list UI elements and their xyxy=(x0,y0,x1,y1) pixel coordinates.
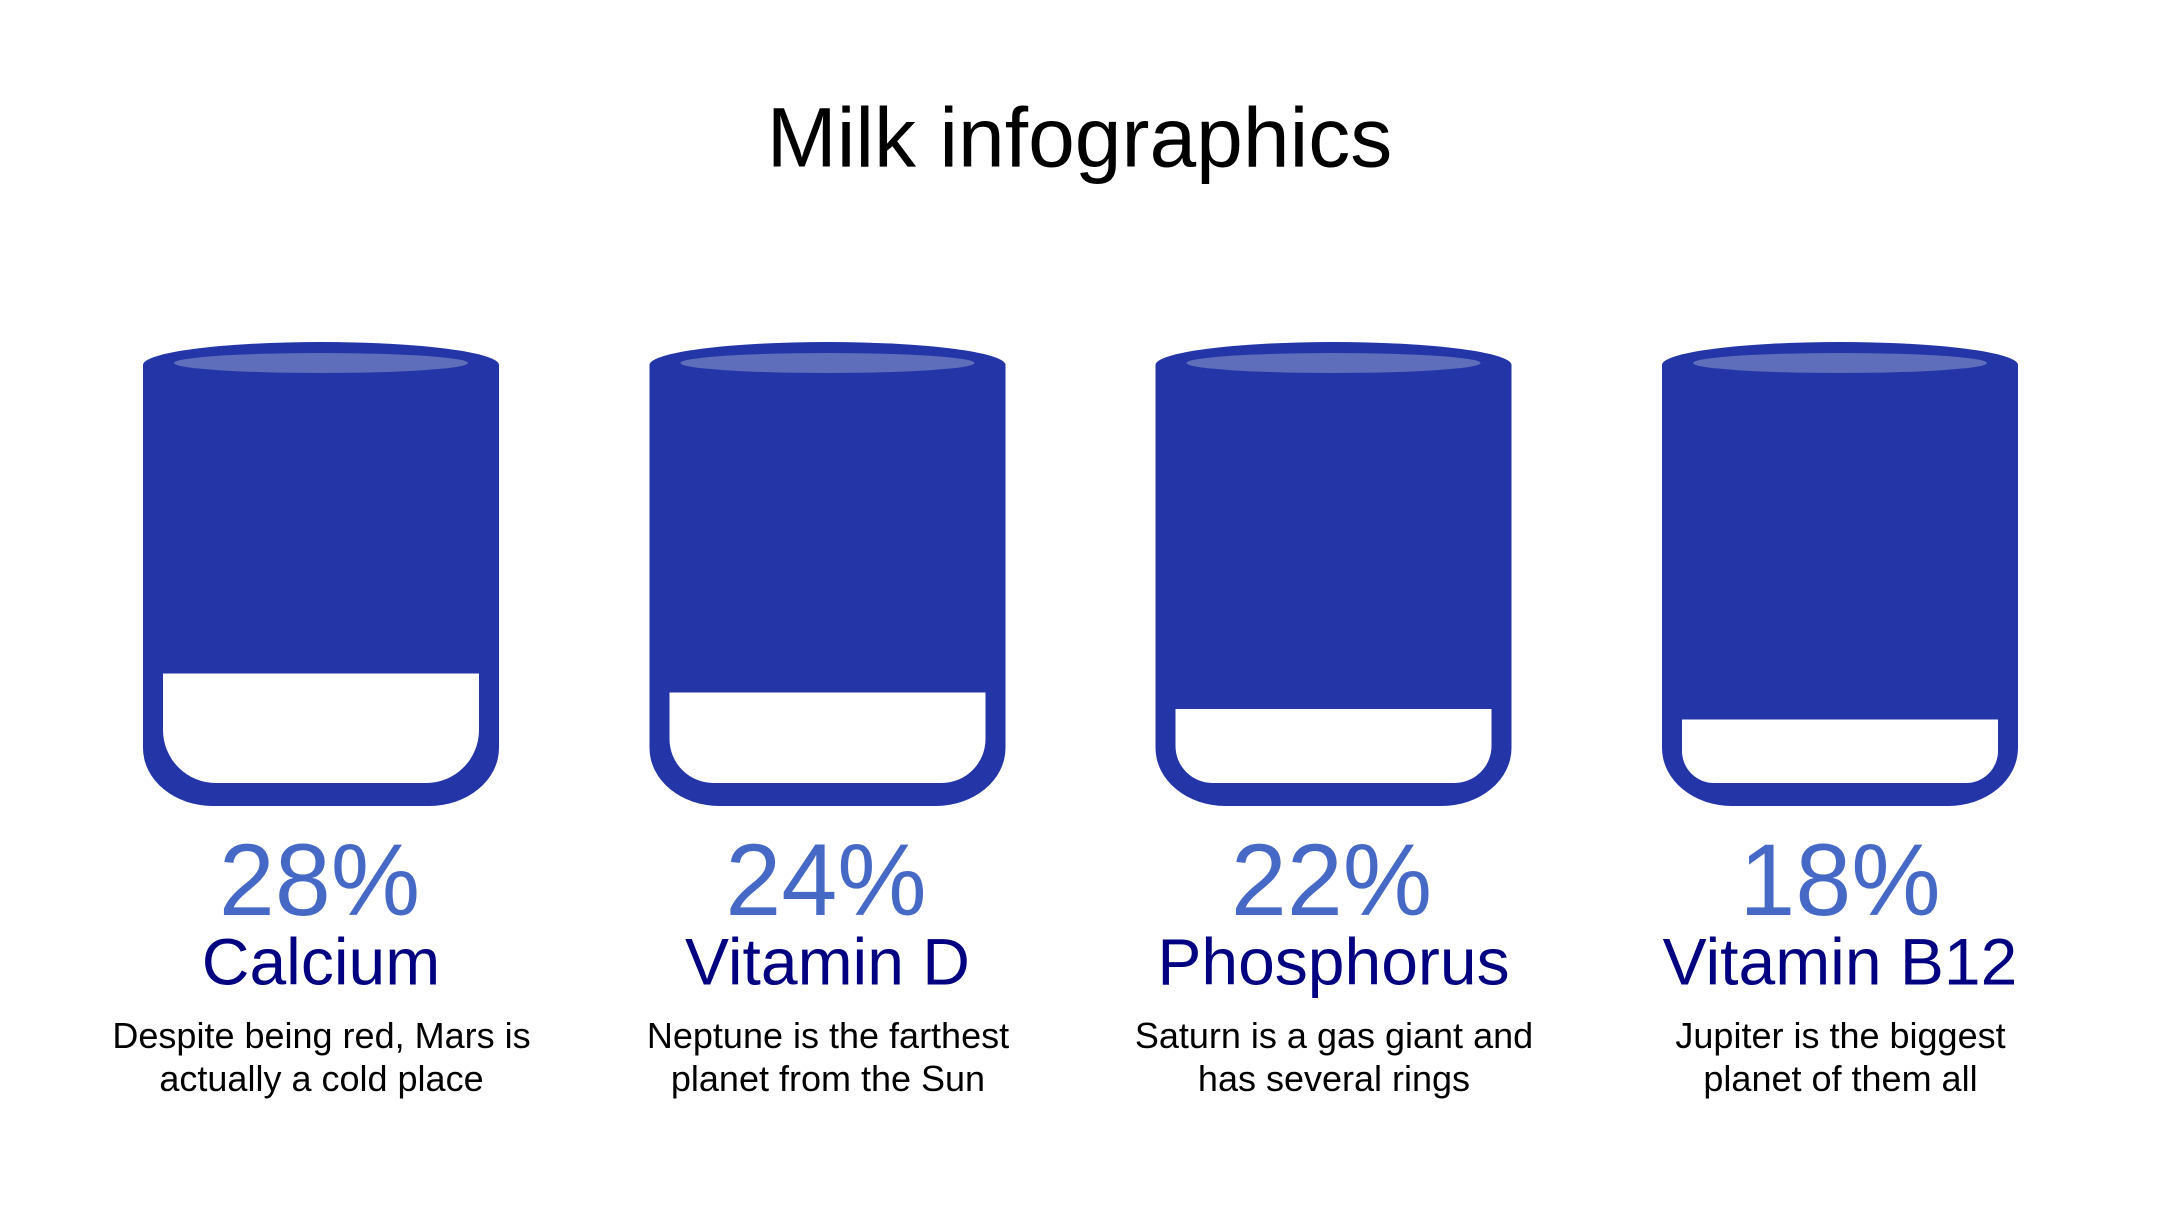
panel: phosphorus xyxy=(1135,342,1533,1099)
icon: vitamin D glass xyxy=(650,342,1006,806)
panel: vitamin D xyxy=(647,342,1009,1099)
icon: vitamin B12 glass xyxy=(1662,342,2018,806)
description: phosphorus: has several rings xyxy=(1198,1058,1470,1099)
title: Milk infographics xyxy=(767,90,1392,185)
description: vitamin B12: planet of them all xyxy=(1703,1058,1978,1099)
description: vitamin D: Neptune is the farthest xyxy=(647,1015,1009,1056)
panel: calcium xyxy=(112,342,531,1099)
heading: Vitamin B12: Vitamin B12 xyxy=(1663,924,2017,998)
heading: Vitamin D: Vitamin D xyxy=(685,924,970,998)
panel: vitamin B12 xyxy=(1662,342,2018,1099)
description: phosphorus: Saturn is a gas giant and xyxy=(1135,1015,1533,1056)
percentage: 28%: 28% xyxy=(219,822,420,937)
description: vitamin D: planet from the Sun xyxy=(671,1058,985,1099)
icon: phosphorus glass xyxy=(1156,342,1512,806)
percentage: 24%: 24% xyxy=(725,822,927,937)
percentage: 22%: 22% xyxy=(1231,822,1432,937)
description: calcium: actually a cold place xyxy=(159,1058,484,1099)
percentage: 18%: 18% xyxy=(1739,822,1941,937)
description: vitamin B12: Jupiter is the biggest xyxy=(1675,1015,2006,1056)
description: calcium: Despite being red, Mars is xyxy=(112,1015,531,1056)
icon: calcium glass xyxy=(143,342,499,806)
heading: Phosphorus: Phosphorus xyxy=(1157,924,1510,998)
heading: Calcium: Calcium xyxy=(202,924,440,998)
